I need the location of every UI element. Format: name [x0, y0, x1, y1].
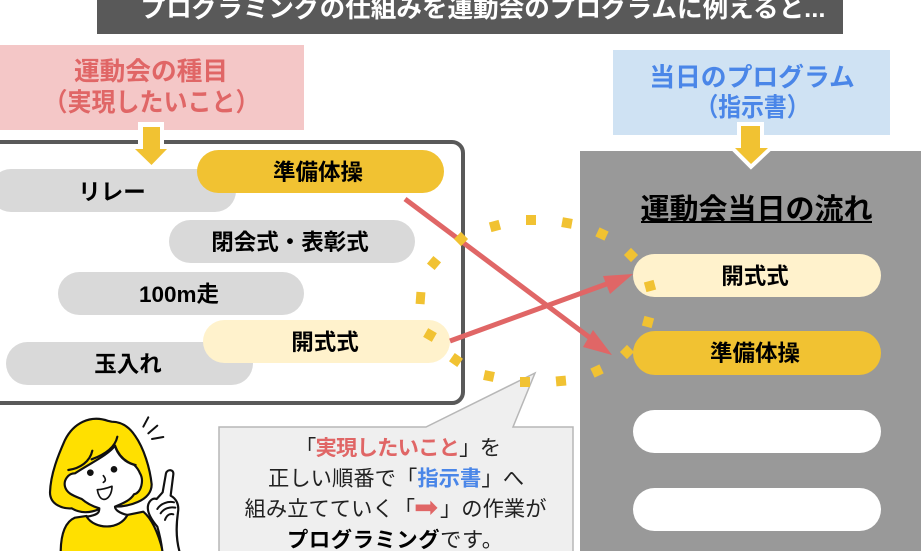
pill: opening ceremony in frame: [203, 320, 450, 363]
hair: [50, 419, 152, 512]
pill: 100m race: [58, 272, 304, 315]
neck and face: [65, 446, 142, 526]
arrow: program down: [735, 126, 768, 164]
pill: opening ceremony in flow: 開式式: [721, 264, 789, 289]
fringe: [68, 437, 136, 470]
pill: relay: [0, 169, 236, 212]
mouth: [97, 486, 112, 499]
heading: sports day flow: 運動会当日の流れ: [640, 193, 873, 226]
hand: [148, 470, 180, 551]
callout: explanation of programming: 」の作業が: [440, 497, 546, 521]
pill: empty slot 4: [633, 488, 881, 531]
arrow: warm-up to flow: [405, 199, 612, 355]
panel: right grey program panel: [580, 151, 921, 551]
pill: 100m race: 100m走: [139, 282, 219, 307]
heading: day program: （指示書）: [696, 93, 810, 122]
arrow: events down: [135, 122, 167, 165]
eyes: [87, 469, 94, 476]
nose: [103, 476, 105, 482]
icon: woman pointing up: [50, 417, 180, 551]
heading: sports day events: [0, 45, 304, 130]
pill: warm-up in frame: 準備体操: [273, 160, 363, 185]
pill: relay: リレー: [78, 180, 146, 205]
pill: ball toss: [6, 342, 253, 385]
heading: sports day events: 運動会の種目: [74, 57, 228, 86]
pill: opening ceremony in frame: 開式式: [291, 330, 359, 355]
heading: day program: 当日のプログラム: [649, 62, 855, 92]
callout: explanation of programming: ➡: [414, 490, 438, 524]
heading: sports day events: （実現したいこと）: [44, 88, 260, 117]
heading: day program: [613, 50, 890, 135]
callout: explanation of programming: 「実現したいこと」を: [295, 436, 501, 460]
pill: closing ceremony: 閉会式・表彰式: [211, 230, 369, 255]
pill: empty slot 3: [633, 410, 881, 453]
shirt: [61, 512, 163, 551]
title banner: [97, 0, 843, 34]
pill: warm-up in flow: [633, 331, 881, 375]
panel: left events frame: [0, 142, 463, 403]
pill: ball toss: 玉入れ: [94, 352, 162, 377]
pill: warm-up in flow: 準備体操: [710, 341, 800, 366]
sparks: [143, 417, 163, 439]
dotted highlight circle: [416, 215, 656, 387]
callout: explanation of programming: 正しい順番で「指示書」へ: [268, 466, 524, 490]
pill: warm-up in frame: [197, 150, 444, 193]
callout: explanation of programming: [219, 373, 573, 551]
arrow: opening to flow: [450, 274, 633, 341]
pill: closing ceremony: [169, 220, 415, 263]
callout: explanation of programming: 組み立てていく「: [245, 497, 415, 521]
pill: opening ceremony in flow: [633, 254, 881, 297]
